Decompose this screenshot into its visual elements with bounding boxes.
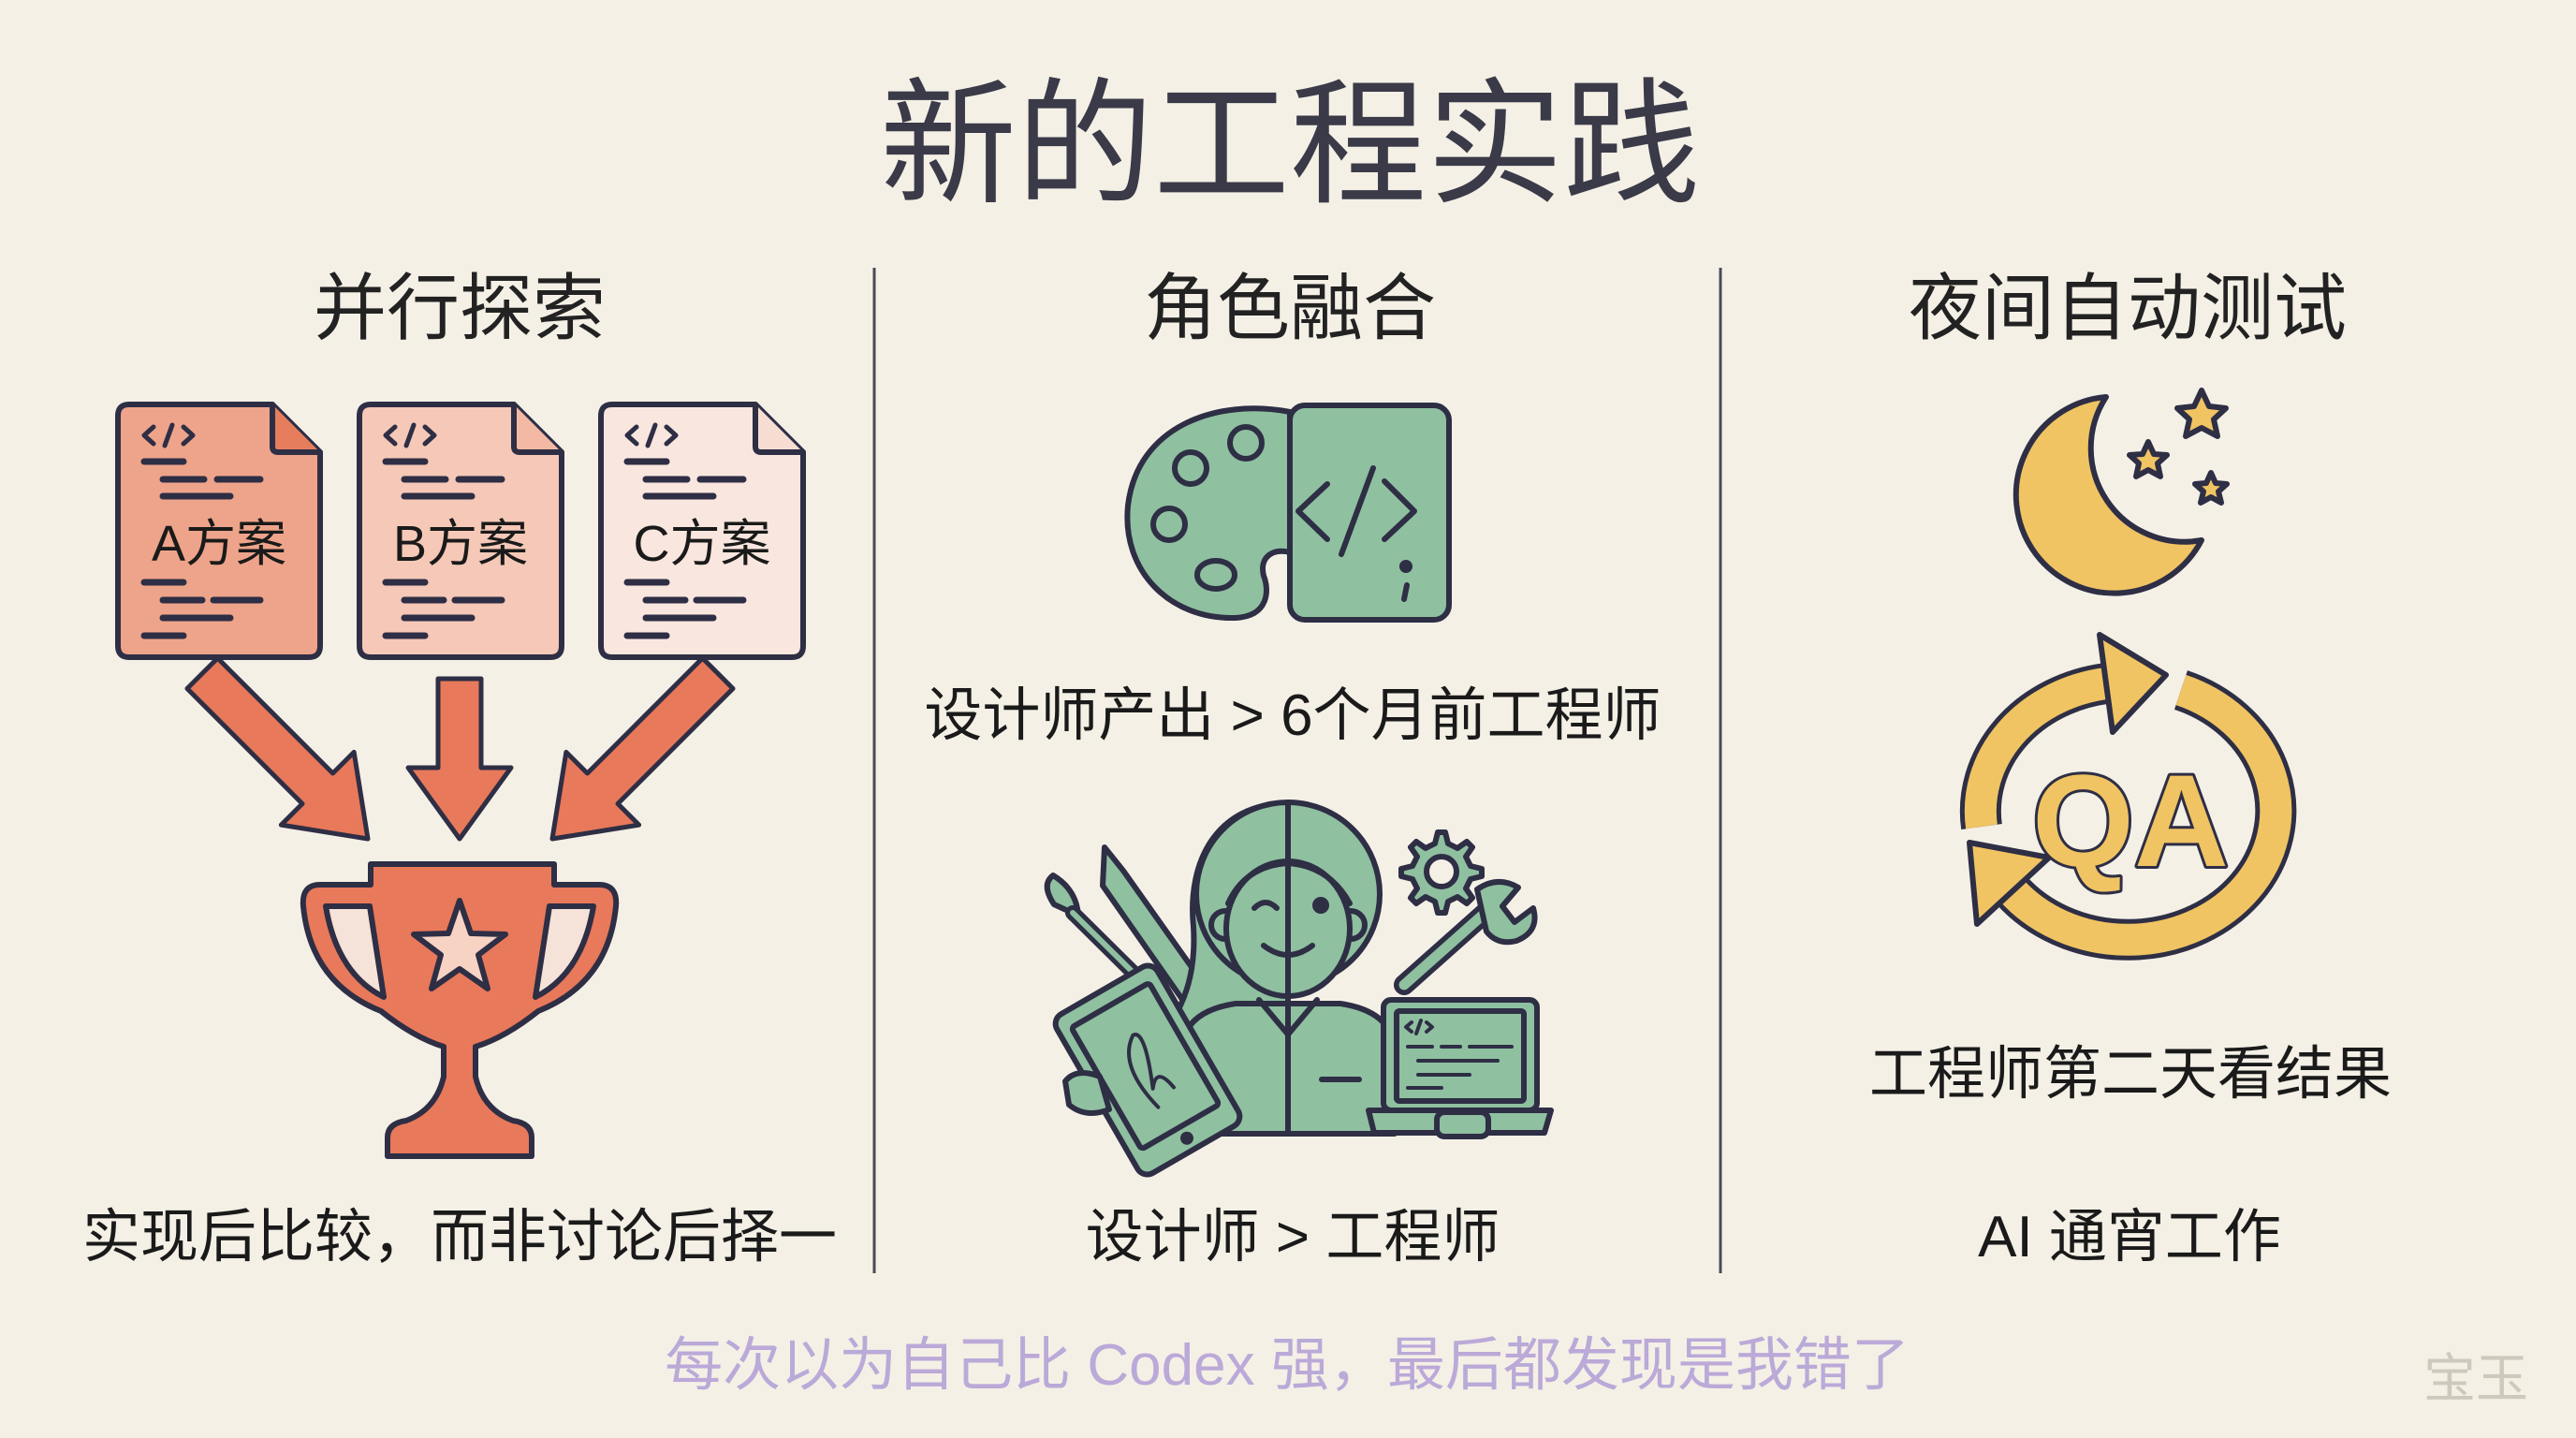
icon: doc B: B方案 [393,516,528,572]
caption: col2 bottom: 设计师 > 工程师 [1086,1205,1500,1269]
icon: doc C [601,404,803,657]
arrow: middle [408,679,511,839]
icon: doc C: C方案 [633,516,771,572]
footer quote: 每次以为自己比 Codex 强，最后都发现是我错了 [665,1333,1910,1398]
heading: 并行探索: 并行探索 [314,267,606,349]
title: 新的工程实践 [880,68,1700,221]
icon: designer-engineer person [1047,802,1551,1179]
caption: col3 top: 工程师第二天看结果 [1869,1042,2392,1107]
icon: doc A: A方案 [152,516,286,572]
icon: QA cycle [1969,635,2276,940]
icon: doc B [359,404,562,657]
signature: 宝玉 [2423,1349,2528,1408]
arrow: left [166,637,404,875]
icon: palette + code [1127,405,1449,620]
panel: role fusion [924,267,1661,1269]
panel: parallel exploration [82,267,837,1269]
icon: trophy [303,864,616,1156]
caption: col1: 实现后比较，而非讨论后择一 [82,1205,837,1269]
arrow: right [516,637,754,875]
caption: col3 bottom: AI 通宵工作 [1978,1205,2281,1269]
heading: 夜间自动测试: 夜间自动测试 [1909,267,2347,349]
caption: col2 top: 设计师产出 > 6个月前工程师 [924,683,1661,748]
icon: QA cycle: QA [2032,747,2229,894]
icon: doc A [118,404,320,657]
icon: moon and stars [2016,390,2227,594]
panel: nightly automated testing [1869,267,2392,1269]
heading: 角色融合: 角色融合 [1144,267,1436,349]
